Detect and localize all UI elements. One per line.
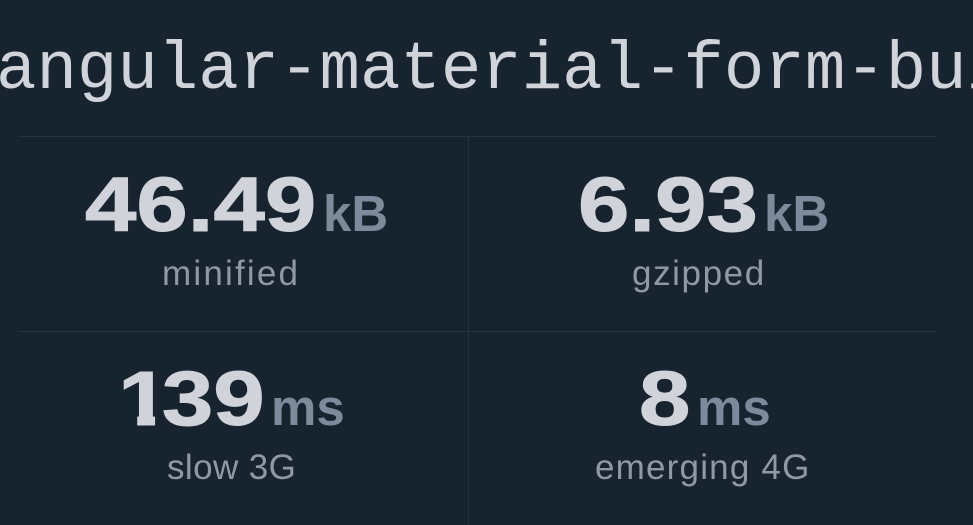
unit: gzipped kB: kB	[764, 185, 829, 242]
unit: slow 3G ms: ms	[271, 379, 345, 436]
label: slow 3G: slow 3G	[167, 448, 296, 487]
metric: emerging 4G time: 8	[639, 356, 690, 442]
metric: minified size: 46.49	[85, 162, 316, 248]
label: minified: minified	[162, 254, 300, 293]
label: emerging 4G: emerging 4G	[595, 448, 811, 487]
metric: gzipped size: 6.93	[578, 162, 757, 248]
label: gzipped: gzipped	[632, 254, 766, 293]
unit: minified kB: kB	[323, 185, 388, 242]
unit: emerging 4G ms: ms	[697, 379, 771, 436]
metric: slow 3G time: 1	[118, 356, 169, 442]
metric: slow 3G time: 39	[162, 356, 265, 442]
